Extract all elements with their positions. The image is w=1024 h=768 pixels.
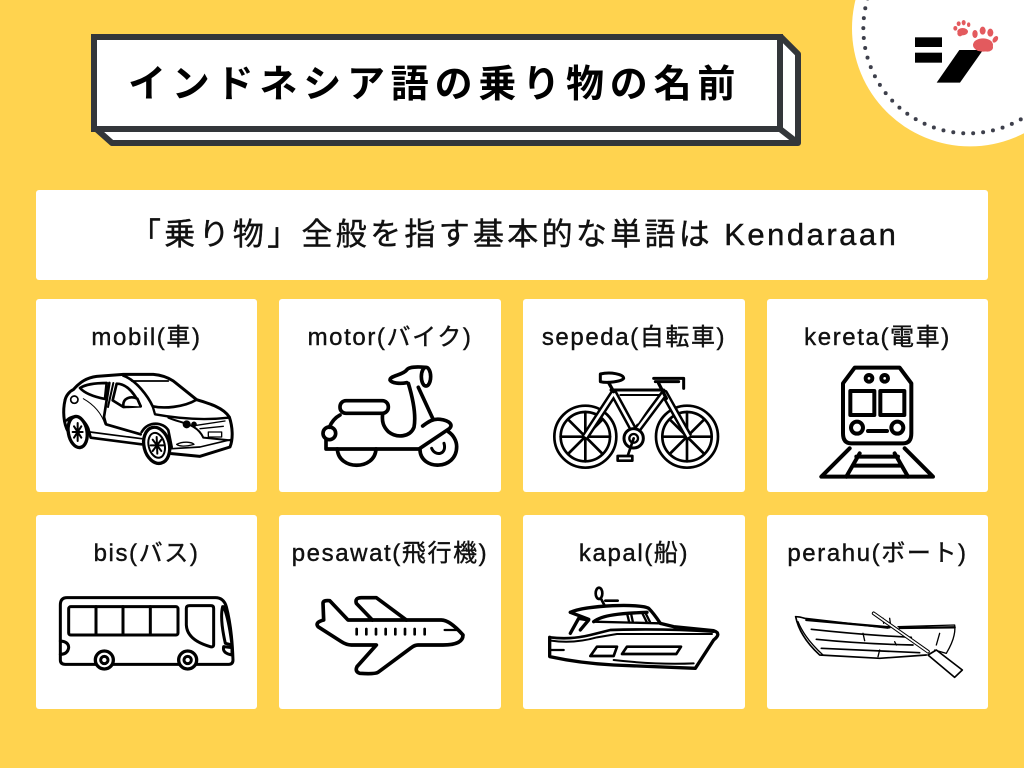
panel: bis bbox=[36, 515, 257, 709]
panel: kereta bbox=[767, 299, 988, 492]
panel: perahu bbox=[767, 515, 988, 709]
panel: mobil bbox=[36, 299, 257, 492]
icon: paw prints bbox=[953, 20, 999, 52]
label: kereta: kereta(電車) bbox=[804, 324, 951, 351]
subtitle panel bbox=[36, 190, 988, 280]
panel: motor bbox=[279, 299, 501, 492]
logo mark bbox=[915, 37, 983, 83]
label: perahu: perahu(ボート) bbox=[787, 540, 968, 567]
label: sepeda: sepeda(自転車) bbox=[542, 324, 726, 351]
title banner bbox=[91, 34, 801, 146]
panel: sepeda bbox=[523, 299, 745, 492]
label: bis: bis(バス) bbox=[94, 540, 199, 567]
label: pesawat: pesawat(飛行機) bbox=[292, 540, 488, 567]
panel: kapal bbox=[523, 515, 745, 709]
logo badge bbox=[852, 0, 1024, 146]
icon: airplane bbox=[315, 596, 465, 676]
title text: インドネシア語の乗り物の名前 bbox=[128, 64, 741, 106]
icon: bicycle bbox=[553, 372, 720, 469]
panel: pesawat bbox=[279, 515, 501, 709]
label: motor: motor(バイク) bbox=[308, 324, 472, 351]
icon: car bbox=[62, 372, 234, 466]
icon: train bbox=[819, 366, 935, 479]
subtitle text: 「乗り物」全般を指す基本的な単語は Kendaraan bbox=[130, 217, 898, 252]
label: kapal: kapal(船) bbox=[579, 540, 689, 567]
icon: scooter bbox=[321, 365, 458, 468]
label: mobil: mobil(車) bbox=[91, 324, 202, 351]
white circle with dotted ring bbox=[852, 0, 1024, 146]
3D box frame bbox=[91, 34, 801, 146]
icon: bus bbox=[58, 596, 234, 671]
icon: motor yacht bbox=[548, 586, 720, 670]
icon: rowboat with oar bbox=[794, 611, 964, 678]
